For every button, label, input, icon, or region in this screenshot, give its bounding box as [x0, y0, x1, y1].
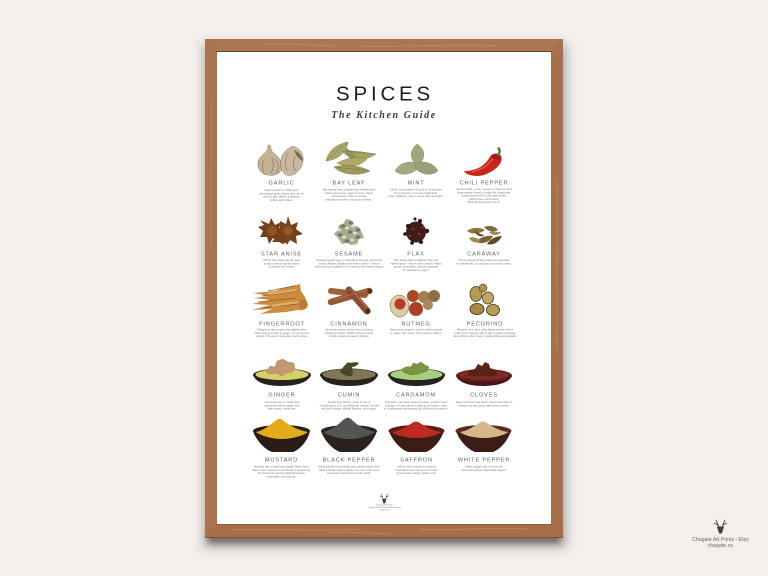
description: Bay leaves have a subtle and herbal flavor [323, 188, 375, 192]
label: CINNAMON [330, 322, 368, 328]
description: milder garlic flavor. [270, 198, 293, 202]
spice: mint [389, 144, 444, 198]
description: to make milk, cream rich to savory dishes. [390, 331, 442, 335]
description: These strong tasting seeds are essential [459, 258, 509, 262]
paper [217, 52, 551, 524]
watermark [692, 520, 749, 549]
description: Garlic powder is made from [264, 188, 299, 192]
icon: garlic bulbs [258, 145, 303, 175]
framed poster [203, 39, 567, 548]
description: a tasty spice mix for chili, taco shells, [461, 194, 507, 198]
spice: caraway [456, 226, 512, 265]
description: Flax seeds have a slightly crisp and [394, 258, 439, 262]
description: Mexican food spice A to Z. [468, 200, 501, 204]
icon: mustard bowl [253, 419, 310, 452]
label: CARDAMOM [396, 392, 436, 398]
spice: ginger [253, 359, 311, 411]
description: Sesame seeds have a nutty flavor and are commonly [316, 258, 383, 262]
label: CARAWAY [467, 252, 501, 258]
spice: garlic [258, 145, 304, 202]
description: Sweet and warming spice. Used most often in [456, 400, 513, 404]
icon: deer head [380, 494, 388, 503]
description: has a spicy, zesty bite. [268, 407, 296, 411]
description: earthy flavor. They're often used in baked [390, 261, 442, 265]
description: baking, but also good with savory dishes. [458, 403, 510, 407]
icon: fingerroot [252, 284, 308, 314]
description: Mustard has a sharp and slightly bitter flavor [254, 464, 309, 468]
poster logo [368, 494, 402, 512]
description: Ground chilis, cumin, oregano, cayenne, and [456, 187, 512, 191]
label: BLACK PEPPER [323, 458, 375, 464]
description: adds a subtle heat to dishes. It's one of the most [319, 468, 379, 472]
icon: caraway pods [467, 226, 502, 245]
icon: ginger plate [253, 359, 311, 386]
label: BAY LEAF [332, 180, 366, 186]
description: Whole star anise can be used [263, 258, 300, 262]
description: Smoky and earthy, cumin is one of [328, 400, 371, 404]
description: Ground ginger is made from [265, 400, 300, 404]
description: gives foods a bright yellow color. [396, 471, 437, 475]
icon: cumin plate [320, 362, 378, 386]
label: MUSTARD [265, 458, 298, 464]
description: used in Middle Eastern and Asian cuisine. They're [318, 261, 380, 265]
icon: chili pepper [464, 147, 502, 176]
spice: nutmeg [390, 290, 443, 335]
footer text: Chagate Art Prints [376, 504, 394, 506]
icon: black pepper bowl [321, 418, 377, 452]
description: cinnamon spices. Stuffs well as a spice [325, 331, 374, 335]
description: Cinnamon spices pretty much anything [325, 328, 374, 332]
subtitle: The Kitchen Guide [331, 110, 437, 121]
description: as North African, Middle Eastern, and Indian. [321, 407, 377, 411]
icon: flax seeds [403, 218, 429, 245]
icon: cinnamon sticks [331, 288, 372, 314]
description: used to give dishes a toasted, [263, 195, 300, 199]
spice: pecorino [453, 284, 517, 338]
description: to sauces and soups. [268, 265, 295, 269]
description: for sauerkraut, sourdough, and potato salad. [456, 261, 512, 265]
description: Southeastern U.S. and Mexican cuisine, as well [319, 403, 379, 407]
description: peas, potatoes, and in mixes with chocolate. [389, 194, 444, 198]
icon: mint leaves [395, 144, 438, 174]
description: in both sweet and savory dishes. [329, 334, 370, 338]
spice: chili pepper [456, 147, 512, 204]
description: and sauces. Often a woody [332, 194, 367, 198]
spice: cinnamon [325, 288, 374, 338]
title: SPICES [336, 82, 434, 106]
description: Fingerroot has a spicy and slightly bitter [257, 328, 307, 332]
label: CLOVES [470, 392, 498, 398]
icon: sesame seeds [334, 219, 364, 245]
icon: bay leaves [326, 142, 376, 174]
description: It's commonly used in salad dressings, [258, 471, 306, 475]
description: in combination with ground dry chilis and cinnamon. [384, 407, 448, 411]
label: PECORINO [467, 322, 503, 328]
spice: cumin [319, 362, 379, 411]
spice: bay leaf [323, 142, 376, 201]
spice: star anise [258, 216, 303, 269]
description: grilled meat, and beans. [469, 197, 499, 201]
icon: cardamom plate [388, 362, 445, 386]
description: often used as a garnish or in savoury and sweet baking. [314, 265, 384, 269]
label: GINGER [268, 392, 296, 398]
description: dehydrated garlic cloves and can be [259, 191, 304, 195]
description: goods, smoothies, and as a topping [394, 265, 439, 269]
description: Black pepper has a sharp and pungent flavor that [318, 464, 380, 468]
description: to add a sweet licorice flavor [264, 261, 299, 265]
spice: cardamom [384, 362, 448, 411]
label: MINT [407, 180, 425, 186]
label: GARLIC [269, 180, 294, 186]
label: FLAX [407, 252, 425, 258]
description: White pepper has a more mild [465, 464, 503, 468]
label: WHITE PEPPER [458, 458, 510, 464]
description: used in Thai and Indonesian food recipes. [256, 334, 308, 338]
spice: white pepper [456, 422, 512, 472]
description: dehydrated fresh ginger and [264, 403, 300, 407]
icon: pecorino pods [470, 284, 500, 316]
spice: mustard [252, 419, 311, 478]
footer text: chagate.co [379, 508, 391, 512]
spice: black pepper [318, 418, 380, 475]
description: This warm, aromatic spice is unique, good in many [385, 400, 448, 404]
description: flavor that is similar to ginger. It's commonly [255, 331, 310, 335]
icon: saffron bowl [388, 422, 444, 452]
description: for a long time. It is used with lamb, [394, 191, 438, 195]
description: Dried mint contains its cool or minty taste [390, 188, 442, 192]
description: that is commonly used in soups, stews [325, 191, 373, 195]
footer text: Original Hand Painted Illustrations [368, 506, 402, 509]
description: flavor that is often used in pasta dishes and salads. [453, 334, 517, 338]
description: Pecorino is a hard, salty Italian cheese that is [457, 328, 514, 332]
description: background note in soups and stews. [326, 197, 372, 201]
description: and earthy flavor than black pepper. [462, 468, 506, 472]
website: chagate.co [708, 543, 733, 549]
label: STAR ANISE [261, 252, 302, 258]
description: made from sheep's milk. It has a sharp and tangy [454, 331, 516, 335]
description: floral flavor and aroma, and it also [395, 468, 438, 472]
spice: sesame [314, 219, 384, 269]
label: SESAME [335, 252, 363, 258]
description: Sweet and pungent, these in baked goods [390, 328, 443, 332]
description: that is often used as a condiment or seasoning. [252, 468, 311, 472]
description: commonly used spices in the world. [327, 471, 371, 475]
icon: cloves plate [456, 362, 512, 386]
spice: fingerroot [252, 284, 310, 338]
description: marinades, and sauces. [267, 474, 297, 478]
icon: white pepper bowl [456, 422, 512, 452]
label: NUTMEG [401, 322, 431, 328]
wooden frame [205, 39, 563, 538]
description: black pepper blend to make this seasoning, [457, 190, 511, 194]
description: Saffron has a subtle but distinct [397, 464, 436, 468]
icon: nutmeg [390, 290, 440, 317]
label: SAFFRON [400, 458, 433, 464]
description: cuisines. It's also great in baking and coffee, used [385, 403, 447, 407]
icon: deer logo [714, 520, 727, 533]
spice: saffron [388, 422, 444, 475]
shop name: Chagate Art Prints - Etsy [692, 537, 749, 543]
description: for oatmeal or yogurt. [403, 268, 430, 272]
icon: star anise [258, 216, 303, 245]
spice: flax [390, 218, 442, 272]
spice: cloves [456, 362, 513, 407]
label: FINGERROOT [259, 322, 305, 328]
label: CHILI PEPPER [460, 180, 508, 186]
label: CUMIN [338, 392, 360, 398]
